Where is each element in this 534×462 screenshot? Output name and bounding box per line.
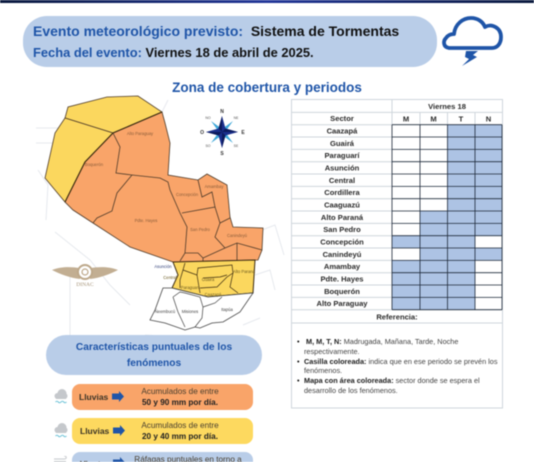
icon: storm cloud [441, 15, 504, 66]
row: rain yellow [72, 418, 253, 444]
table text: T [459, 114, 464, 124]
icon: compass rose: SE [234, 144, 239, 148]
icon: rain cloud 1 [54, 388, 68, 404]
icon: compass rose: N [220, 109, 224, 115]
row: rain orange: Lluvias [79, 392, 108, 402]
icon: compass rose [200, 109, 245, 157]
map labels: Alto Paraguay [127, 131, 154, 136]
note: letters: • [297, 337, 300, 346]
table text: Sector [330, 114, 354, 123]
map labels: Pdte. Hayes [135, 218, 157, 223]
row: rain orange: 50 y 90 mm por día. [142, 398, 218, 406]
table text: M [430, 114, 437, 124]
logo: DINAC wings: DINAC [76, 282, 94, 288]
panel heading: characteristics: Características puntuales de los [76, 342, 232, 353]
map labels: San Pedro [190, 227, 211, 232]
map labels: Guairá [202, 277, 215, 282]
event line: Evento meteorológico previsto: Sistema de Tormentas [33, 22, 399, 38]
icon: compass rose: NO [205, 116, 211, 120]
region: orange zone [65, 112, 263, 263]
row: rain yellow: Acumulados de entre [141, 420, 219, 430]
map labels: Ñeembucú [155, 309, 176, 314]
date line: Fecha del evento: Viernes 18 de abril de 2025. [33, 44, 314, 60]
map labels: Caazapá [205, 292, 222, 297]
region: yellow zone south [172, 260, 255, 297]
table text: Pdte. Hayes [320, 274, 364, 284]
icon: compass rose: E [241, 130, 245, 136]
table text: Caaguazú [324, 200, 360, 210]
table text: Guairá [330, 139, 355, 148]
note: coloured map: • [297, 376, 300, 385]
region: uncoloured south [150, 288, 253, 330]
period cell grid [392, 125, 502, 310]
map of Paraguay [36, 94, 284, 335]
table text: San Pedro [323, 225, 361, 234]
map labels: Misiones [182, 309, 198, 314]
table text: Cordillera [324, 188, 360, 197]
row: rain orange: Acumulados de entre [141, 386, 219, 396]
section title: Zona de cobertura y periodos [172, 80, 362, 95]
table text: N [486, 114, 491, 124]
table text: Caazapá [327, 126, 358, 136]
table text: Asunción [325, 164, 360, 172]
row: rain yellow: Lluvias [80, 426, 109, 436]
map labels: Boquerón [85, 162, 104, 167]
map labels: Canindeyú [227, 233, 248, 238]
top bar [0, 0, 534, 3]
table text: Central [329, 176, 355, 185]
icon: wind [54, 456, 68, 462]
note: letters: respectivamente. [304, 347, 360, 356]
table text: Alto Paraná [321, 213, 364, 222]
table text: Referencia: [376, 312, 418, 322]
note: coloured map: desarrollo de los fenómenos. [304, 386, 398, 395]
table text [316, 102, 491, 322]
note: coloured map: Mapa con área coloreada: sector donde se espera el [304, 376, 480, 385]
icon: arrow [112, 456, 125, 462]
note: coloured cell [296, 357, 498, 375]
icon: compass rose: O [200, 130, 204, 136]
table text: Amambay [324, 262, 361, 271]
table text: Viernes 18 [428, 102, 466, 111]
row: wind blue [72, 452, 253, 462]
map labels: Amambay [205, 184, 224, 189]
row: rain orange [72, 384, 253, 410]
note: coloured cell: Casilla coloreada: indica que en ese periodo se prevén los [304, 357, 498, 366]
icon: compass rose: SO [205, 144, 211, 148]
note: coloured cell: fenómenos. [304, 366, 342, 375]
map labels: Itapúa [221, 307, 233, 312]
icon: compass rose: S [220, 151, 224, 157]
map labels: Asunción [154, 264, 172, 269]
note: coloured cell: • [297, 357, 300, 366]
note: letters [296, 337, 459, 356]
table text: Paraguarí [324, 151, 360, 160]
table text: Concepción [320, 238, 364, 246]
panel heading: characteristics [46, 335, 262, 375]
map labels: Concepción [176, 192, 199, 197]
map labels: Alto Paraná [233, 269, 256, 274]
note: coloured map [296, 376, 480, 395]
table text: M [403, 114, 409, 124]
icon: rain cloud 2 [54, 422, 68, 438]
note: letters: M, M, T, N: Madrugada, Mañana, Tarde, Noche [306, 337, 458, 346]
map labels: Central [163, 275, 177, 280]
logo: DINAC wings [52, 265, 118, 288]
row: rain yellow: 20 y 40 mm por día. [142, 432, 218, 440]
map labels [85, 131, 256, 314]
table outer frame and grey grid [292, 100, 502, 408]
map labels: Paraguarí [181, 285, 200, 290]
table text: Canindeyú [323, 250, 362, 259]
reference notes [296, 337, 498, 395]
icon: compass rose: NE [234, 116, 239, 120]
table text: Alto Paraguay [316, 299, 368, 308]
coloured period cells [392, 125, 502, 310]
icon: arrow [111, 390, 124, 402]
header pill [23, 16, 437, 67]
table text: Boquerón [324, 287, 360, 296]
icon: arrow [112, 424, 126, 436]
panel heading: characteristics: fenómenos [127, 358, 181, 369]
region: yellow zone north [45, 96, 162, 202]
